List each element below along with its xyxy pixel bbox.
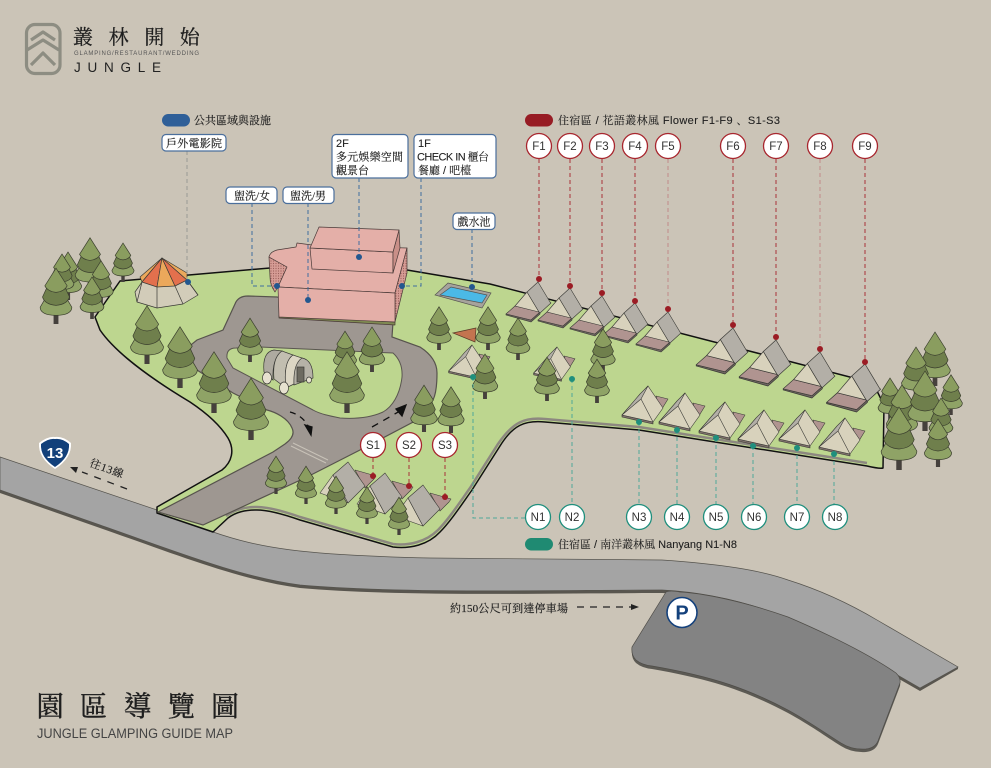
trees [40,238,962,535]
badge text N: N2 [565,512,579,524]
route 13 shield: 13 [47,445,63,462]
badge text F and S: F3 [595,141,609,153]
badges F1-F9 and S1-S3 [360,134,878,458]
flower tents F1-F9 [506,282,881,412]
label: women's restroom: 盥洗/女 [234,188,270,202]
badges N1-N8 [526,504,848,530]
parking icon: P [675,602,689,624]
badge text N: N7 [790,512,804,524]
badge text N [531,512,842,524]
legend: public facilities [162,113,271,127]
label: men's restroom: 盥洗/男 [290,188,326,202]
label: outdoor cinema: 戶外電影院 [166,136,222,150]
parking distance text: 約150公尺可到達停車場 [450,601,568,615]
label: pool: 戲水池 [458,214,490,228]
public facility dots [185,254,475,303]
badge text F and S: F5 [661,141,675,153]
flower leader lines [373,159,865,497]
public facility leader lines [187,151,472,300]
legend: flower: 住宿區 / 花語叢林風 Flower F1-F9 、S1-S3 [558,113,780,127]
badge text N: N6 [747,512,761,524]
logo [26,24,201,75]
title: 園區導覽圖 [36,691,239,723]
subtitle: JUNGLE GLAMPING GUIDE MAP [37,726,233,741]
badge text N: N3 [632,512,646,524]
arrow to route 13 [70,467,127,489]
swimming pool [435,283,491,308]
park land [95,268,884,547]
legend: public facilities: 公共區域與設施 [194,113,271,127]
nanyang dots [470,374,837,457]
label: second floor [332,134,408,178]
driveway [158,296,437,525]
legend: nanyang: 住宿區 / 南洋叢林風 Nanyang N1-N8 [558,537,737,551]
badge text F and S: F7 [769,141,783,153]
flower dots [370,276,868,500]
road arrows [290,405,406,435]
label: second floor: 觀景台 [336,163,369,177]
label: first floor: CHECK IN 櫃台 [417,150,489,164]
nanyang leader lines [473,377,834,518]
parking icon [667,598,697,628]
badge text F and S: F1 [532,141,546,153]
logo chinese name: 叢林開始 [73,26,201,49]
label: outdoor cinema [162,134,226,151]
central island lawn [227,347,402,418]
badge text N: N8 [828,512,842,524]
badge text F and S: S1 [366,440,380,452]
yurt outdoor cinema [135,258,198,308]
badge text F and S: F9 [858,141,872,153]
label: second floor: 多元娛樂空間 [336,150,403,164]
badge text F and S: F4 [628,141,642,153]
badge text F and S: S2 [402,440,416,452]
label: first floor [414,134,496,178]
label: pool [453,213,495,230]
label: first floor: 餐廳 / 吧檯 [418,163,471,177]
badge text F and S: S3 [438,440,452,452]
badge text N: N1 [531,512,545,524]
to route 13 text: 往13線 [88,457,125,481]
badge text N: N4 [670,512,685,524]
covered wagon [262,350,313,394]
logo mark [26,24,60,74]
main road [0,457,958,691]
badge text F and S [366,141,872,452]
badge text F and S: F6 [726,141,740,153]
badge text N: N5 [709,512,723,524]
arrow to parking [577,604,639,610]
route 13 shield [39,437,71,469]
small wooden deck [453,328,476,342]
main building [269,227,407,325]
parking lot [632,591,900,752]
flower tents S1-S3 [320,462,451,526]
badge text F and S: F2 [563,141,577,153]
label: second floor: 2F [336,138,349,150]
logo tagline: GLAMPING/RESTAURANT/WEDDING [74,51,199,57]
label: women's restroom [226,187,277,204]
nanyang tents N1-N8 [449,345,865,456]
crosswalk [291,443,328,463]
logo english name: JUNGLE [74,60,161,75]
badge text F and S: F8 [813,141,827,153]
label: men's restroom [283,187,334,204]
label: first floor: 1F [418,138,431,150]
